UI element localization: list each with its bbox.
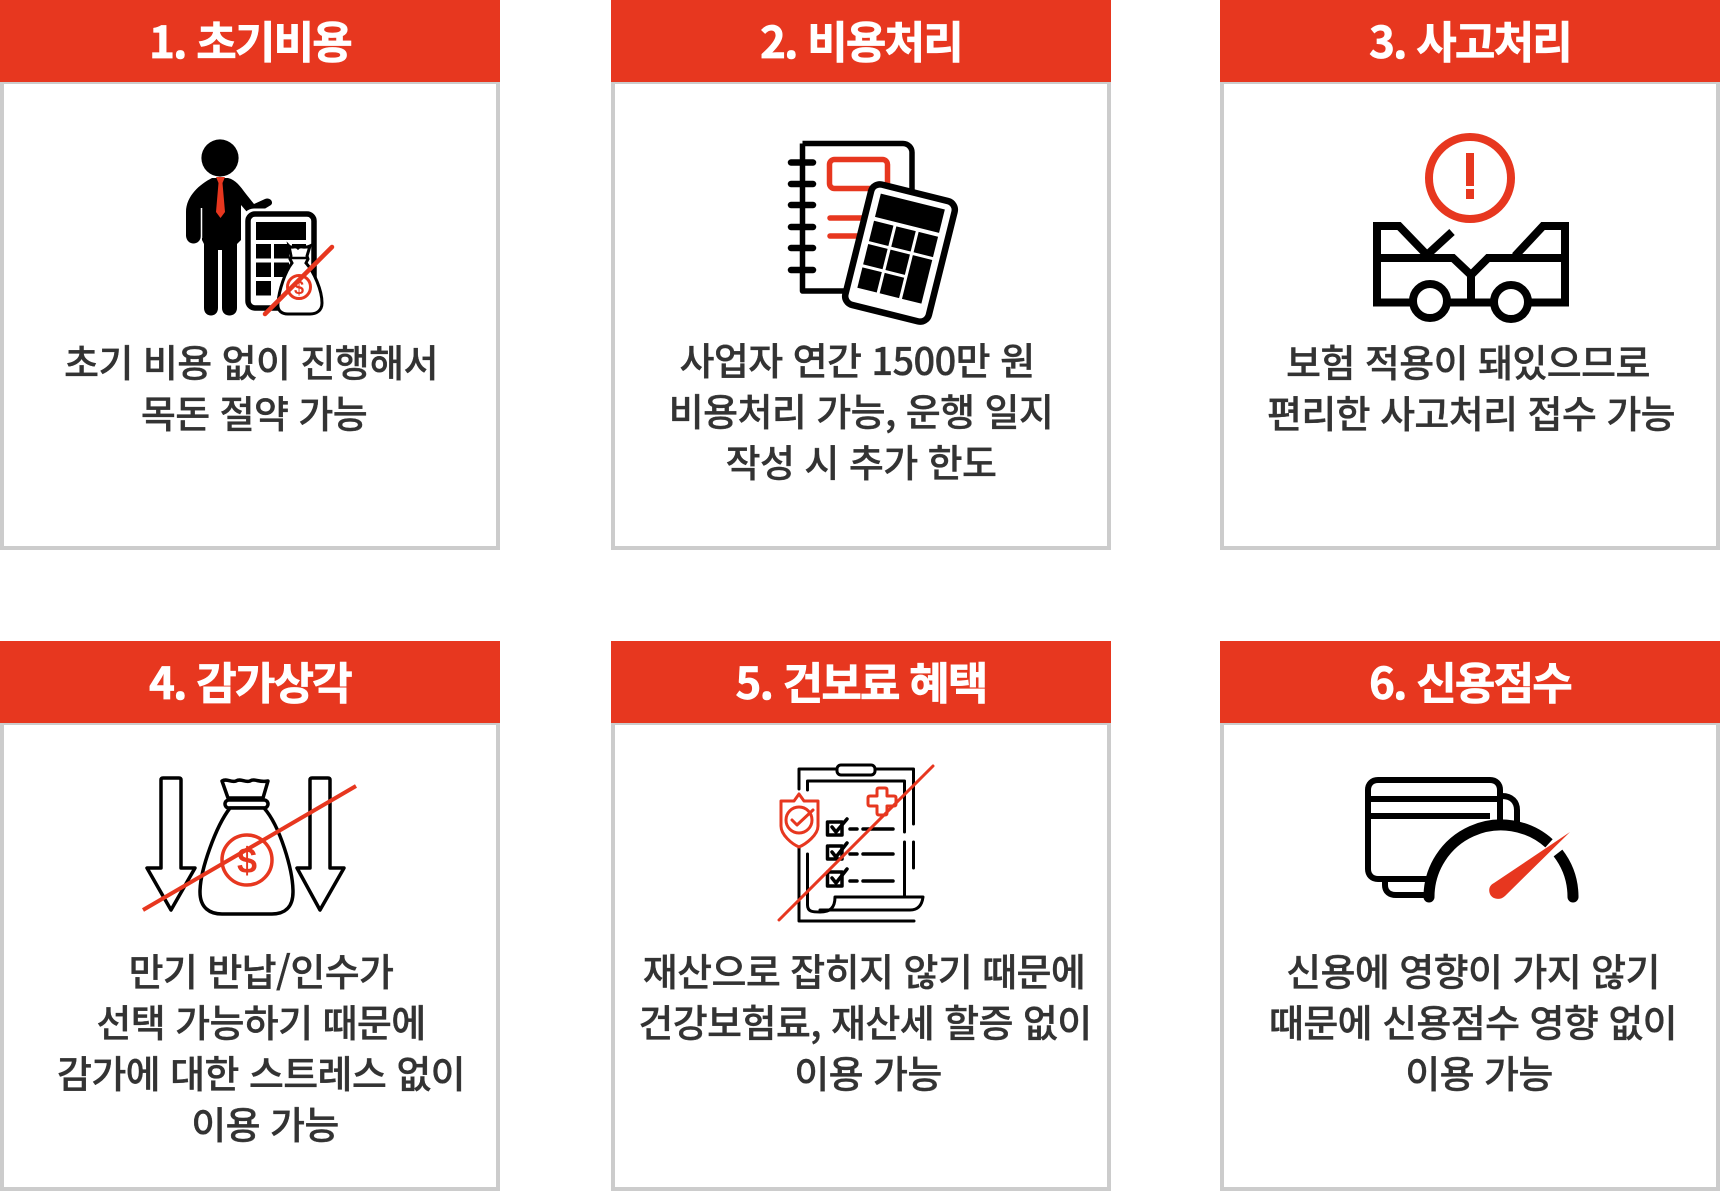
heading: 3: 3. 사고처리 (1369, 7, 1571, 71)
text block: description 1: 초기 비용 없이 진행해서 (64, 333, 438, 388)
text block: description 6 (1269, 942, 1677, 1099)
panel: 2 expense processing (611, 0, 1111, 550)
icon: card and gauge (1365, 777, 1578, 902)
text block: description 4: 이용 가능 (191, 1095, 339, 1150)
text block: description 3: 편리한 사고처리 접수 가능 (1267, 384, 1675, 439)
heading: 1 (0, 0, 500, 82)
text block: description 2: 비용처리 가능, 운행 일지 (669, 382, 1053, 437)
heading: 2: 2. 비용처리 (760, 7, 962, 71)
text block: description 4: 선택 가능하기 때문에 (96, 993, 426, 1048)
text block: description 6: 때문에 신용점수 영향 없이 (1269, 993, 1677, 1048)
heading: 5 (611, 641, 1111, 723)
text block: description 2 (669, 331, 1053, 488)
heading: 6 (1220, 641, 1720, 723)
panel: 1 initial cost (0, 0, 500, 550)
heading: 4 (0, 641, 500, 723)
heading: 6: 6. 신용점수 (1369, 648, 1571, 712)
panel: 4 depreciation (0, 641, 500, 1191)
panel: 5 health insurance (611, 641, 1111, 1191)
text block: description 5: 건강보험료, 재산세 할증 없이 (638, 993, 1092, 1048)
text block: description 5: 재산으로 잡히지 않기 때문에 (643, 942, 1085, 997)
icon: person with calculator and crossed money bag: $ (294, 278, 304, 298)
icon: crashed cars with alert (1373, 133, 1569, 323)
text block: description 1: 목돈 절약 가능 (141, 384, 367, 439)
icon: crossed clipboard with shield (777, 764, 935, 922)
text block: description 4 (57, 942, 465, 1150)
heading: 3 (1220, 0, 1720, 82)
text block: description 4: 만기 반납/인수가 (129, 942, 393, 997)
panel: 6 credit score (1220, 641, 1720, 1191)
icon: arrows and crossed money bag (142, 776, 357, 916)
panel: 3 accident handling (1220, 0, 1720, 550)
heading: 2 (611, 0, 1111, 82)
text block: description 6: 이용 가능 (1405, 1044, 1553, 1099)
icon: person with calculator and crossed money bag (186, 139, 334, 316)
text block: description 5: 이용 가능 (794, 1044, 942, 1099)
text block: description 1 (64, 333, 438, 439)
text block: description 5 (638, 942, 1092, 1099)
text block: description 4: 감가에 대한 스트레스 없이 (57, 1044, 465, 1099)
text block: description 6: 신용에 영향이 가지 않기 (1286, 942, 1660, 997)
text block: description 3: 보험 적용이 돼있으므로 (1286, 333, 1650, 388)
heading: 1: 1. 초기비용 (149, 7, 351, 71)
icon: arrows and crossed money bag: $ (237, 840, 257, 881)
text block: description 2: 작성 시 추가 한도 (726, 433, 996, 488)
icon: notebook and calculator (788, 140, 958, 325)
text block: description 2: 사업자 연간 1500만 원 (680, 331, 1034, 386)
text block: description 3 (1267, 333, 1675, 439)
heading: 5: 5. 건보료 혜택 (735, 648, 987, 712)
heading: 4: 4. 감가상각 (149, 648, 351, 712)
